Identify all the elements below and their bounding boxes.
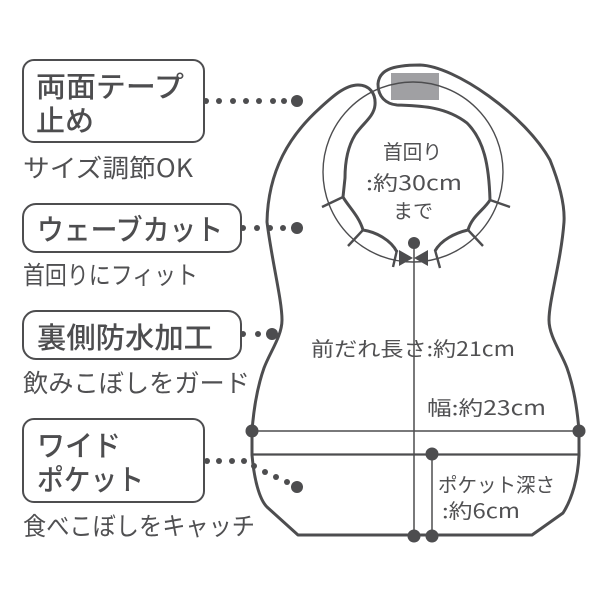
neck measurement label: まで xyxy=(393,195,433,224)
callout: waterproof back: 飲みこぼしをガード xyxy=(23,364,250,400)
callout: double-sided tape: 両面テープ xyxy=(36,64,184,106)
callout: wide pocket: ワイド xyxy=(37,423,121,465)
callout: double-sided tape xyxy=(23,60,303,185)
callout: wave cut: ウェーブカット xyxy=(37,207,223,249)
scallop ticks xyxy=(322,197,510,268)
measurement lines xyxy=(246,237,586,542)
neck measurement label xyxy=(366,136,462,224)
callout: wide pocket xyxy=(23,419,303,543)
callout: double-sided tape: サイズ調節OK xyxy=(23,149,194,185)
callout: double-sided tape: 止め xyxy=(36,98,94,140)
neck measurement label: 首回り xyxy=(383,136,442,165)
width measurement label: 幅:約23cm xyxy=(427,392,546,421)
pocket depth label xyxy=(438,469,555,524)
neck circle guide xyxy=(323,82,503,262)
callout: waterproof back xyxy=(23,311,278,400)
pocket depth label: :約6cm xyxy=(442,495,520,524)
callout: wave cut xyxy=(23,204,303,292)
neck measurement label: :約30cm xyxy=(366,167,462,196)
gray tape patch xyxy=(391,73,439,100)
callout: wide pocket: ポケット xyxy=(37,457,144,499)
callout: wave cut: 首回りにフィット xyxy=(23,256,198,292)
pocket depth label: ポケット深さ xyxy=(438,469,555,498)
bib outline xyxy=(252,65,579,535)
bib illustration xyxy=(252,65,579,535)
bow marker xyxy=(399,250,428,266)
callout: waterproof back: 裏側防水加工 xyxy=(37,315,213,357)
callout: wide pocket: 食べこぼしをキャッチ xyxy=(23,507,255,543)
length measurement label: 前だれ長さ:約21cm xyxy=(311,333,515,362)
